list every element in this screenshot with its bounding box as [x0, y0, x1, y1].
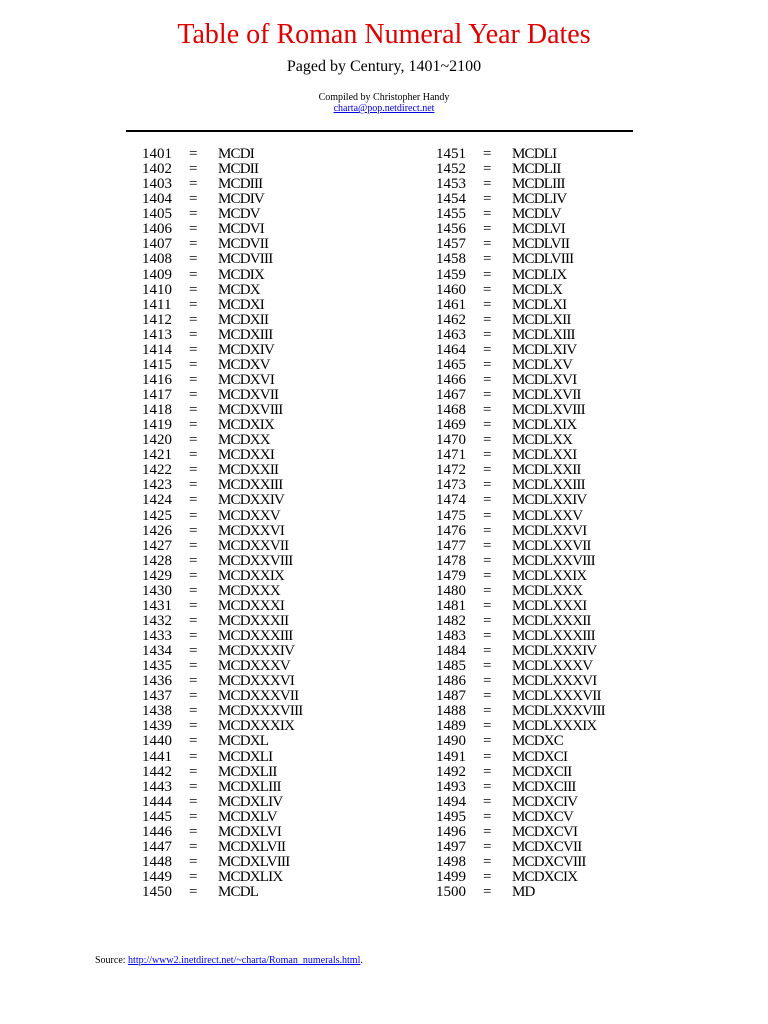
compiler credit: Compiled by Christopher Handy	[319, 92, 449, 103]
right table column: = = = = = = = = = = = = = = = = = = = = = = = = = = = = = = = = = = = = = = = = = = = = = = = = = =	[483, 146, 491, 900]
compiler credit	[319, 92, 450, 114]
subtitle: Paged by Century, 1401~2100	[287, 58, 481, 75]
title: Table of Roman Numeral Year Dates	[177, 19, 591, 50]
left table column: = = = = = = = = = = = = = = = = = = = = = = = = = = = = = = = = = = = = = = = = = = = = = = = = = =	[189, 146, 197, 900]
left table column: 1401 1402 1403 1404 1405 1406 1407 1408 1409 1410 1411 1412 1413 1414 1415 1416 1417 1418 1419 1420 1421 1422 1423 1424 1425 1426 1427 1428 1429 1430 1431 1432 1433 1434 1435 1436 1437 1438 1439 1440 1441 1442 1443 1444 1445 1446 1447 1448 1449 1450	[142, 146, 172, 900]
left table column: MCDI MCDII MCDIII MCDIV MCDV MCDVI MCDVII MCDVIII MCDIX MCDX MCDXI MCDXII MCDXIII MCDXIV MCDXV MCDXVI MCDXVII MCDXVIII MCDXIX MCDXX MCDXXI MCDXXII MCDXXIII MCDXXIV MCDXXV MCDXXVI MCDXXVII MCDXXVIII MCDXXIX MCDXXX MCDXXXI MCDXXXII MCDXXXIII MCDXXXIV MCDXXXV MCDXXXVI MCDXXXVII MCDXXXVIII MCDXXXIX MCDXL MCDXLI MCDXLII MCDXLIII MCDXLIV MCDXLV MCDXLVI MCDXLVII MCDXLVIII MCDXLIX MCDL	[218, 146, 302, 900]
right table column: 1451 1452 1453 1454 1455 1456 1457 1458 1459 1460 1461 1462 1463 1464 1465 1466 1467 1468 1469 1470 1471 1472 1473 1474 1475 1476 1477 1478 1479 1480 1481 1482 1483 1484 1485 1486 1487 1488 1489 1490 1491 1492 1493 1494 1495 1496 1497 1498 1499 1500	[436, 146, 466, 900]
compiler credit: charta@pop.netdirect.net	[334, 103, 434, 114]
left table column	[142, 146, 303, 900]
right table column	[436, 146, 606, 900]
source note: Source: http://www2.inetdirect.net/~charta/Roman_numerals.html.	[95, 955, 363, 966]
right table column: MCDLI MCDLII MCDLIII MCDLIV MCDLV MCDLVI MCDLVII MCDLVIII MCDLIX MCDLX MCDLXI MCDLXII MCDLXIII MCDLXIV MCDLXV MCDLXVI MCDLXVII MCDLXVIII MCDLXIX MCDLXX MCDLXXI MCDLXXII MCDLXXIII MCDLXXIV MCDLXXV MCDLXXVI MCDLXXVII MCDLXXVIII MCDLXXIX MCDLXXX MCDLXXXI MCDLXXXII MCDLXXXIII MCDLXXXIV MCDLXXXV MCDLXXXVI MCDLXXXVII MCDLXXXVIII MCDLXXXIX MCDXC MCDXCI MCDXCII MCDXCIII MCDXCIV MCDXCV MCDXCVI MCDXCVII MCDXCVIII MCDXCIX MD	[512, 146, 605, 900]
